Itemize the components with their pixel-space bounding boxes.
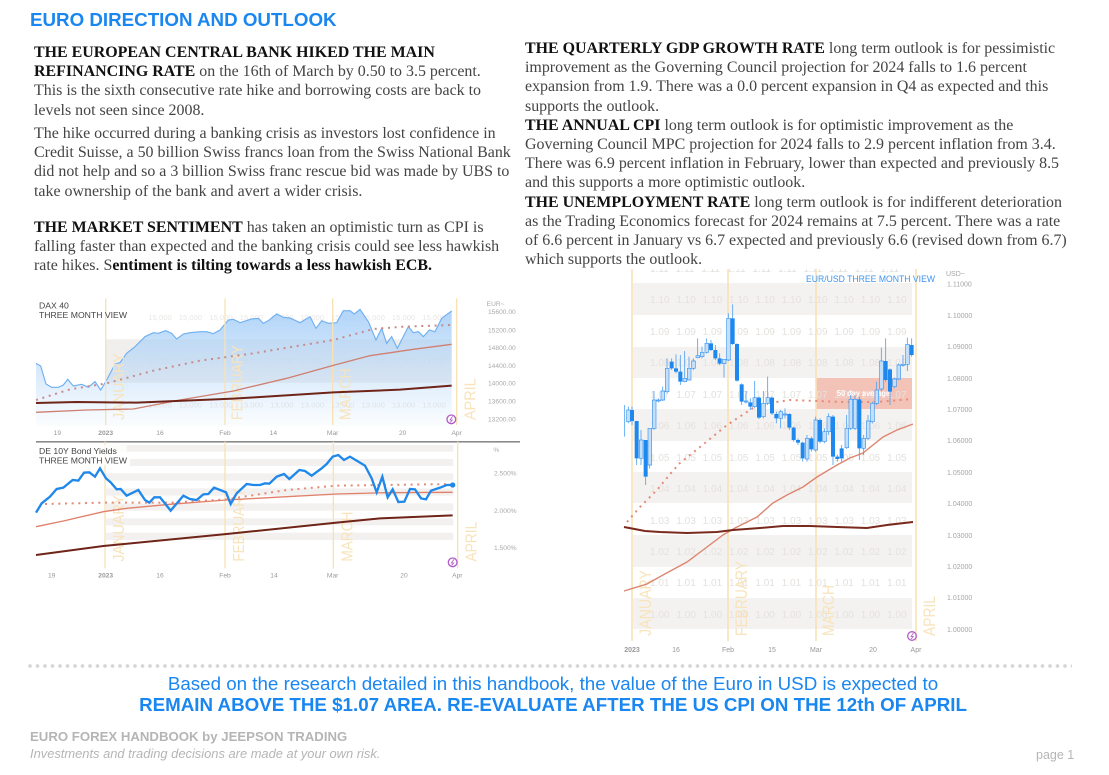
charts layer [35, 269, 972, 654]
chart: DE 10Y Bond Yields: 1.500% [494, 545, 517, 552]
chart: DE 10Y Bond Yields: JANUARY [111, 495, 128, 562]
chart: EUR/USD candlesticks: 1.07 1.07 1.07 1.07 1.07 1.07 1.07 1.07 1.07 1.07 [650, 390, 907, 401]
chart: EUR/USD candlesticks: 1.05000 [947, 470, 972, 477]
text block: banking crisis: Credit Suisse, a 50 billion Swiss francs loan from the Swiss National Bank [34, 144, 511, 161]
chart: DE 10Y Bond Yields: Mar [327, 573, 339, 580]
chart: EUR/USD candlesticks: 1.01 1.01 1.01 1.01 1.01 1.01 1.01 1.01 1.01 1.01 [650, 578, 907, 589]
text block: market sentiment: THE MARKET SENTIMENT has taken an optimistic turn as CPI is [34, 219, 484, 236]
chart: EUR/USD candlesticks: 1.10000 [947, 313, 972, 320]
chart: EUR/USD candlesticks: 50 day average [837, 389, 891, 398]
text block: GDP, CPI and unemployment outlook [525, 40, 1067, 268]
chart: EUR/USD candlesticks: 15 [768, 647, 776, 654]
text block: ECB rate hike: THE EUROPEAN CENTRAL BANK HIKED THE MAIN [34, 44, 435, 61]
chart: DE 10Y Bond Yields: Feb [219, 573, 231, 580]
chart: DAX 40: 15,000 15,000 15,000 15,000 15,000 15,000 15,000 15,000 15,000 15,000 [148, 313, 446, 322]
text block: banking crisis: The hike occurred during a banking crisis as investors lost confidence in [34, 125, 496, 142]
chart: DAX 40: 19 [54, 430, 61, 437]
conclusion: euro forecast [139, 672, 967, 715]
chart: DE 10Y Bond Yields: 16 [156, 573, 164, 580]
chart: DAX 40: 15600.00 [488, 309, 516, 316]
text block: ECB rate hike: levels not seen since 2008. [34, 102, 204, 119]
chart: EUR/USD candlesticks: 1.09000 [947, 344, 972, 351]
chart: EUR/USD candlesticks: 2023 [624, 647, 640, 654]
footer: handbook credit: EURO FOREX HANDBOOK by JEEPSON TRADING [30, 729, 347, 744]
chart: EUR/USD candlesticks: 1.00000 [947, 627, 972, 634]
text block: GDP, CPI and unemployment outlook: THE QUARTERLY GDP GROWTH RATE long term outlook is for pessimistic [525, 40, 1055, 57]
chart: DE 10Y Bond Yields: DE 10Y Bond Yields [39, 446, 117, 456]
text block: market sentiment: rate hikes. Sentiment is tilting towards a less hawkish ECB. [34, 257, 432, 274]
chart: DE 10Y Bond Yields: THREE MONTH VIEW [39, 456, 128, 466]
chart: DAX 40: 13200.00 [488, 416, 516, 423]
chart: DE 10Y Bond Yields: MARCH [339, 512, 356, 562]
chart: EUR/USD candlesticks: 1.07000 [947, 407, 972, 414]
chart: EUR/USD candlesticks: APRIL [920, 596, 939, 636]
chart: DAX 40: EUR~ [487, 301, 505, 308]
chart: EUR/USD candlesticks: Mar [810, 647, 823, 654]
text block: ECB rate hike [34, 44, 481, 119]
chart: DAX 40: 14400.00 [488, 363, 516, 370]
chart: EUR/USD candlesticks: 1.08 1.08 1.08 1.08 1.08 1.08 1.08 1.08 1.08 1.08 [650, 358, 907, 369]
chart: EUR/USD candlesticks: 1.05 1.05 1.05 1.05 1.05 1.05 1.05 1.05 1.05 1.05 [650, 453, 907, 464]
chart: EUR/USD candlesticks: 1.00 1.00 1.00 1.00 1.00 1.00 1.00 1.00 1.00 1.00 [650, 610, 907, 621]
chart: DAX 40: MARCH [338, 368, 355, 420]
chart: EUR/USD candlesticks: EUR/USD THREE MONTH VIEW [806, 274, 936, 285]
text block: banking crisis: did not help and so a 3 billion Swiss franc rescue bid was made by UBS to [34, 163, 509, 180]
chart: DE 10Y Bond Yields: % [493, 447, 499, 454]
chart: EUR/USD candlesticks: 1.03 1.03 1.03 1.03 1.03 1.03 1.03 1.03 1.03 1.03 [650, 516, 907, 527]
chart: DAX 40: 13,000 13,000 13,000 13,000 13,000 13,000 13,000 13,000 13,000 13,000 [148, 401, 446, 410]
text block: market sentiment: falling faster than expected and the banking crisis could see less hawkish [34, 238, 499, 255]
chart: EUR/USD candlesticks: 1.02000 [947, 564, 972, 571]
text block: market sentiment [34, 219, 499, 274]
text block: GDP, CPI and unemployment outlook: of 6.6 percent in January vs 6.7 expected and previously 6.6 (revised down from 6.7) [525, 232, 1067, 249]
text block: banking crisis: take ownership of the bank and avert a wider crisis. [34, 183, 362, 200]
chart: DAX 40: FEBRUARY [229, 345, 246, 420]
chart: EUR/USD candlesticks: 1.08000 [947, 376, 972, 383]
conclusion: euro forecast: REMAIN ABOVE THE $1.07 AREA. RE-EVALUATE AFTER THE US CPI ON THE 12th OF APRIL [139, 694, 967, 715]
chart: EUR/USD candlesticks: USD~ [946, 271, 965, 278]
chart: EUR/USD candlesticks: 1.10 1.10 1.10 1.10 1.10 1.10 1.10 1.10 1.10 1.10 [650, 295, 907, 306]
chart: EUR/USD candlesticks: 1.01000 [947, 595, 972, 602]
text block: banking crisis [34, 125, 511, 200]
text block: GDP, CPI and unemployment outlook: Governing Council MPC projection for 2024 falls to 2.9 percent inflation from 3.4. [525, 136, 1056, 153]
chart: EUR/USD candlesticks: 1.02 1.02 1.02 1.02 1.02 1.02 1.02 1.02 1.02 1.02 [650, 547, 907, 558]
chart: DAX 40: Mar [327, 430, 339, 437]
chart: DAX 40: 13600.00 [488, 398, 516, 405]
text block: GDP, CPI and unemployment outlook: and this supports a more optimistic outlook. [525, 174, 805, 191]
chart: EUR/USD candlesticks: 20 [869, 647, 877, 654]
chart: DAX 40: THREE MONTH VIEW [39, 310, 128, 320]
chart: DAX 40: 2023 [98, 430, 113, 437]
chart: DE 10Y Bond Yields: 2023 [98, 573, 113, 580]
chart: EUR/USD candlesticks: Feb [722, 647, 734, 654]
chart: DAX 40: 14,000 14,000 14,000 14,000 14,000 14,000 14,000 14,000 14,000 14,000 [148, 357, 446, 366]
chart: EUR/USD candlesticks: FEBRUARY [732, 561, 751, 636]
text block: GDP, CPI and unemployment outlook: THE UNEMPLOYMENT RATE long term outlook is for indifferent deterioration [525, 194, 1062, 211]
chart: EUR/USD candlesticks: Apr [911, 647, 922, 654]
chart: DE 10Y Bond Yields: 2.000% [494, 508, 517, 515]
chart: EUR/USD candlesticks: 1.11000 [947, 282, 972, 288]
chart: EUR/USD candlesticks: 16 [672, 647, 680, 654]
text block: GDP, CPI and unemployment outlook: improvement as the Governing Council projection for 2024 falls to 1.6 percent [525, 59, 1027, 76]
chart: EUR/USD candlesticks: 1.06000 [947, 438, 972, 445]
chart: DAX 40: APRIL [463, 378, 480, 420]
chart: DE 10Y Bond Yields: FEBRUARY [231, 488, 248, 562]
text block: GDP, CPI and unemployment outlook: expansion from 1.9. There was a 0.0 percent expansion in Q4 as expected and this [525, 78, 1048, 95]
chart: DE 10Y Bond Yields: 2.500% [494, 471, 517, 478]
chart: DE 10Y Bond Yields: 20 [400, 573, 408, 580]
chart: DAX 40: 16 [156, 430, 164, 437]
text block: GDP, CPI and unemployment outlook: supports the outlook. [525, 98, 659, 115]
conclusion: euro forecast: Based on the research detailed in this handbook, the value of the Euro in USD is expected to [168, 672, 938, 694]
chart: EUR/USD candlesticks: 1.09 1.09 1.09 1.09 1.09 1.09 1.09 1.09 1.09 1.09 [650, 327, 907, 338]
chart: EUR/USD candlesticks: 1.11 1.11 1.11 1.11 1.11 1.11 1.11 1.11 1.11 1.11 [650, 264, 900, 275]
chart: DE 10Y Bond Yields: 19 [48, 573, 56, 580]
chart: DAX 40: 14800.00 [488, 345, 516, 352]
footer: page number: page 1 [1036, 748, 1074, 762]
chart: EUR/USD candlesticks: 1.03000 [947, 533, 972, 540]
chart: DAX 40: 15200.00 [488, 327, 516, 334]
chart: DAX 40: Apr [451, 430, 463, 437]
chart: EUR/USD candlesticks: JANUARY [636, 570, 655, 636]
text block: ECB rate hike: REFINANCING RATE on the 16th of March by 0.50 to 3.5 percent. [34, 63, 481, 80]
chart: EUR/USD candlesticks [624, 264, 972, 654]
title: EURO DIRECTION AND OUTLOOK [30, 9, 337, 30]
chart: EUR/USD candlesticks: 1.04 1.04 1.04 1.04 1.04 1.04 1.04 1.04 1.04 1.04 [650, 484, 907, 495]
chart: DAX 40: 14000.00 [488, 381, 516, 388]
chart: DAX 40 [36, 298, 516, 437]
chart: DE 10Y Bond Yields: 14 [270, 573, 278, 580]
chart: DAX 40: JANUARY [111, 353, 128, 420]
footer: disclaimer: Investments and trading decisions are made at your own risk. [30, 746, 380, 761]
chart: EUR/USD candlesticks: 1.04000 [947, 501, 972, 508]
chart: DE 10Y Bond Yields [36, 442, 517, 580]
chart: DE 10Y Bond Yields: APRIL [463, 522, 480, 562]
text block: GDP, CPI and unemployment outlook: THE ANNUAL CPI long term outlook is for optimistic improvement as the [525, 117, 1013, 134]
chart: DAX 40: Feb [219, 430, 231, 437]
chart: DAX 40: 20 [399, 430, 407, 437]
text block: ECB rate hike: This is the sixth consecutive rate hike and borrowing costs are back to [34, 82, 481, 99]
chart: EUR/USD candlesticks: 1.06 1.06 1.06 1.06 1.06 1.06 1.06 1.06 1.06 1.06 [650, 421, 907, 432]
text block: GDP, CPI and unemployment outlook: There was 6.9 percent inflation in February, lower than expected and previously 8.5 [525, 155, 1059, 172]
text block: GDP, CPI and unemployment outlook: as the Trading Economics forecast for 2024 remains at 7.5 percent. There was a rate [525, 213, 1060, 230]
text block: GDP, CPI and unemployment outlook: which supports the outlook. [525, 251, 702, 268]
divider between DAX and bond charts [36, 441, 520, 443]
chart: DE 10Y Bond Yields: Apr [452, 573, 463, 580]
chart: DAX 40: DAX 40 [39, 300, 69, 310]
dotted divider [28, 664, 1072, 668]
chart: DAX 40: 14 [270, 430, 277, 437]
chart: EUR/USD candlesticks: MARCH [819, 585, 838, 636]
